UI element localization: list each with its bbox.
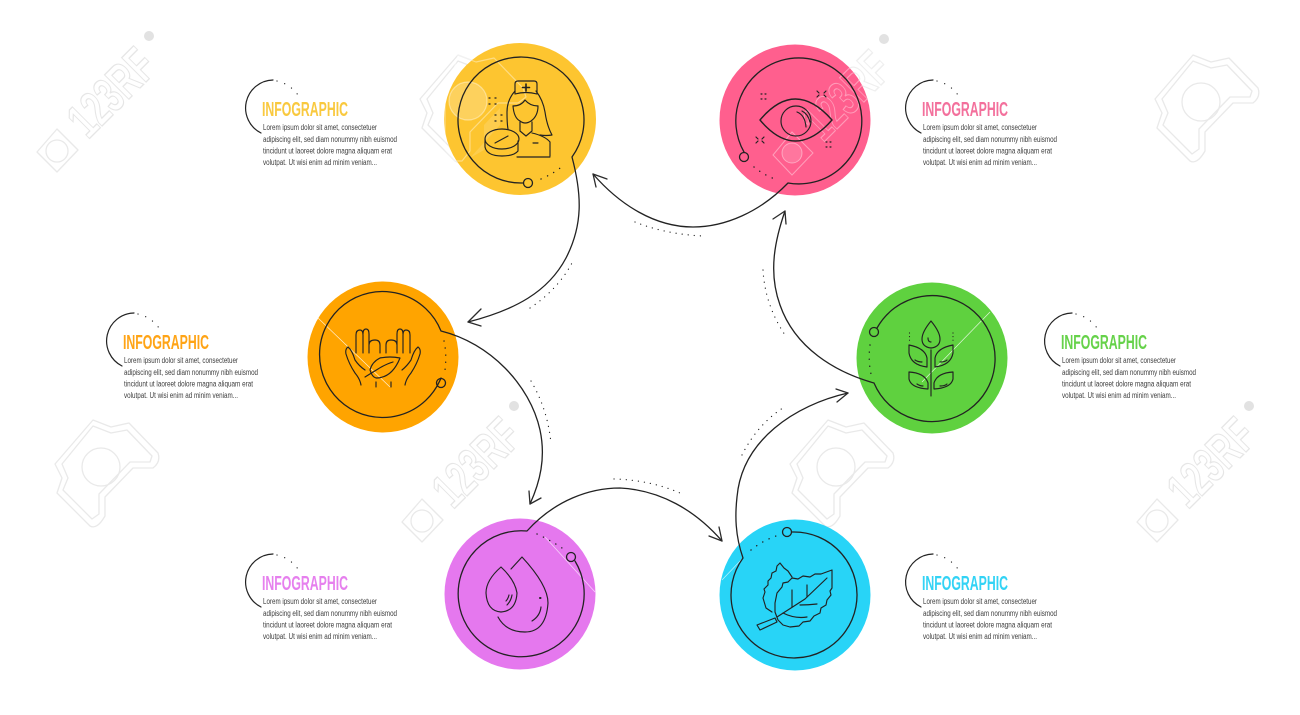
- circle: pink: [720, 44, 870, 196]
- text block: pink: tincidunt ut laoreet dolore magna aliquam erat: [923, 146, 1053, 156]
- text block: orange: Lorem ipsum dolor sit amet, consectetuer: [124, 356, 238, 365]
- text block: green: tincidunt ut laoreet dolore magna aliquam erat: [1062, 380, 1192, 388]
- text block: pink: adipiscing elit, sed diam nonummy nibh euismod: [923, 135, 1057, 144]
- icon: wheat with water drop: [909, 321, 953, 396]
- text block: blue: adipiscing elit, sed diam nonummy nibh euismod: [923, 609, 1057, 618]
- circle: purple: [444, 518, 596, 670]
- icon: water drops: [486, 557, 548, 632]
- text block: purple: volutpat. Ut wisi enim ad minim veniam...: [263, 632, 377, 641]
- text block: yellow: INFOGRAPHIC: [262, 99, 348, 121]
- circle: yellow: [444, 43, 596, 195]
- text block: orange: tincidunt ut laoreet dolore magna aliquam erat: [124, 380, 254, 388]
- text block: orange: adipiscing elit, sed diam nonummy nibh euismod: [124, 368, 258, 377]
- text block: green: [1045, 313, 1196, 400]
- text block: purple: tincidunt ut laoreet dolore magna aliquam erat: [263, 620, 393, 630]
- text block: orange: INFOGRAPHIC: [123, 332, 209, 354]
- text block: purple: INFOGRAPHIC: [262, 573, 348, 595]
- text block: green: Lorem ipsum dolor sit amet, consectetuer: [1062, 356, 1176, 365]
- text block: purple: [246, 554, 397, 641]
- icon: leaves: [757, 563, 832, 630]
- watermarks on background: 123RF: [56, 37, 166, 148]
- text block: yellow: adipiscing elit, sed diam nonummy nibh euismod: [263, 135, 397, 144]
- text block: pink: Lorem ipsum dolor sit amet, consectetuer: [923, 123, 1037, 132]
- watermarks on background: [37, 31, 1266, 542]
- watermarks on background: 123RF: [791, 40, 901, 151]
- watermark overlay on circles: [318, 40, 990, 592]
- text block: yellow: tincidunt ut laoreet dolore magna aliquam erat: [263, 146, 393, 156]
- text block: yellow: Lorem ipsum dolor sit amet, consectetuer: [263, 123, 377, 132]
- text block: blue: volutpat. Ut wisi enim ad minim veniam...: [923, 632, 1037, 641]
- text block: purple: Lorem ipsum dolor sit amet, consectetuer: [263, 597, 377, 606]
- text block: orange: [107, 313, 258, 400]
- icon: eye: [756, 91, 832, 147]
- text block: pink: [906, 80, 1057, 167]
- text block: blue: [906, 554, 1057, 641]
- circle: blue: [720, 520, 870, 670]
- text block: blue: INFOGRAPHIC: [922, 573, 1008, 595]
- text block: green: adipiscing elit, sed diam nonummy nibh euismod: [1062, 368, 1196, 377]
- text block: pink: INFOGRAPHIC: [922, 99, 1008, 121]
- text block: yellow: volutpat. Ut wisi enim ad minim veniam...: [263, 158, 377, 167]
- text block: purple: adipiscing elit, sed diam nonummy nibh euismod: [263, 609, 397, 618]
- text block: blue: tincidunt ut laoreet dolore magna aliquam erat: [923, 620, 1053, 630]
- ring and arrow: purple to blue: [458, 488, 722, 657]
- circle: green: [856, 282, 1008, 434]
- text block: green: volutpat. Ut wisi enim ad minim veniam...: [1062, 391, 1176, 400]
- ring and arrow: yellow to orange: [458, 57, 584, 326]
- ring and arrow: orange to purple: [320, 292, 542, 504]
- text block: blue: Lorem ipsum dolor sit amet, consectetuer: [923, 597, 1037, 606]
- icon: nurse with pill: [485, 81, 552, 157]
- dotted accent arcs between circles: [530, 222, 786, 493]
- watermarks on background: 123RF: [1156, 407, 1266, 518]
- text block: orange: volutpat. Ut wisi enim ad minim veniam...: [124, 391, 238, 400]
- watermarks on background: 123RF: [421, 407, 531, 518]
- ring and arrow: green to pink: [773, 211, 995, 422]
- icon: hands holding leaf: [346, 329, 420, 387]
- text block: green: INFOGRAPHIC: [1061, 332, 1147, 354]
- watermark overlay on circles: 123RF: [791, 40, 901, 151]
- ring and arrow: blue to green: [731, 389, 857, 658]
- circle: orange: [308, 282, 458, 432]
- text block: yellow: [246, 80, 397, 167]
- text block: pink: volutpat. Ut wisi enim ad minim veniam...: [923, 158, 1037, 167]
- ring and arrow: pink to yellow: [593, 58, 862, 227]
